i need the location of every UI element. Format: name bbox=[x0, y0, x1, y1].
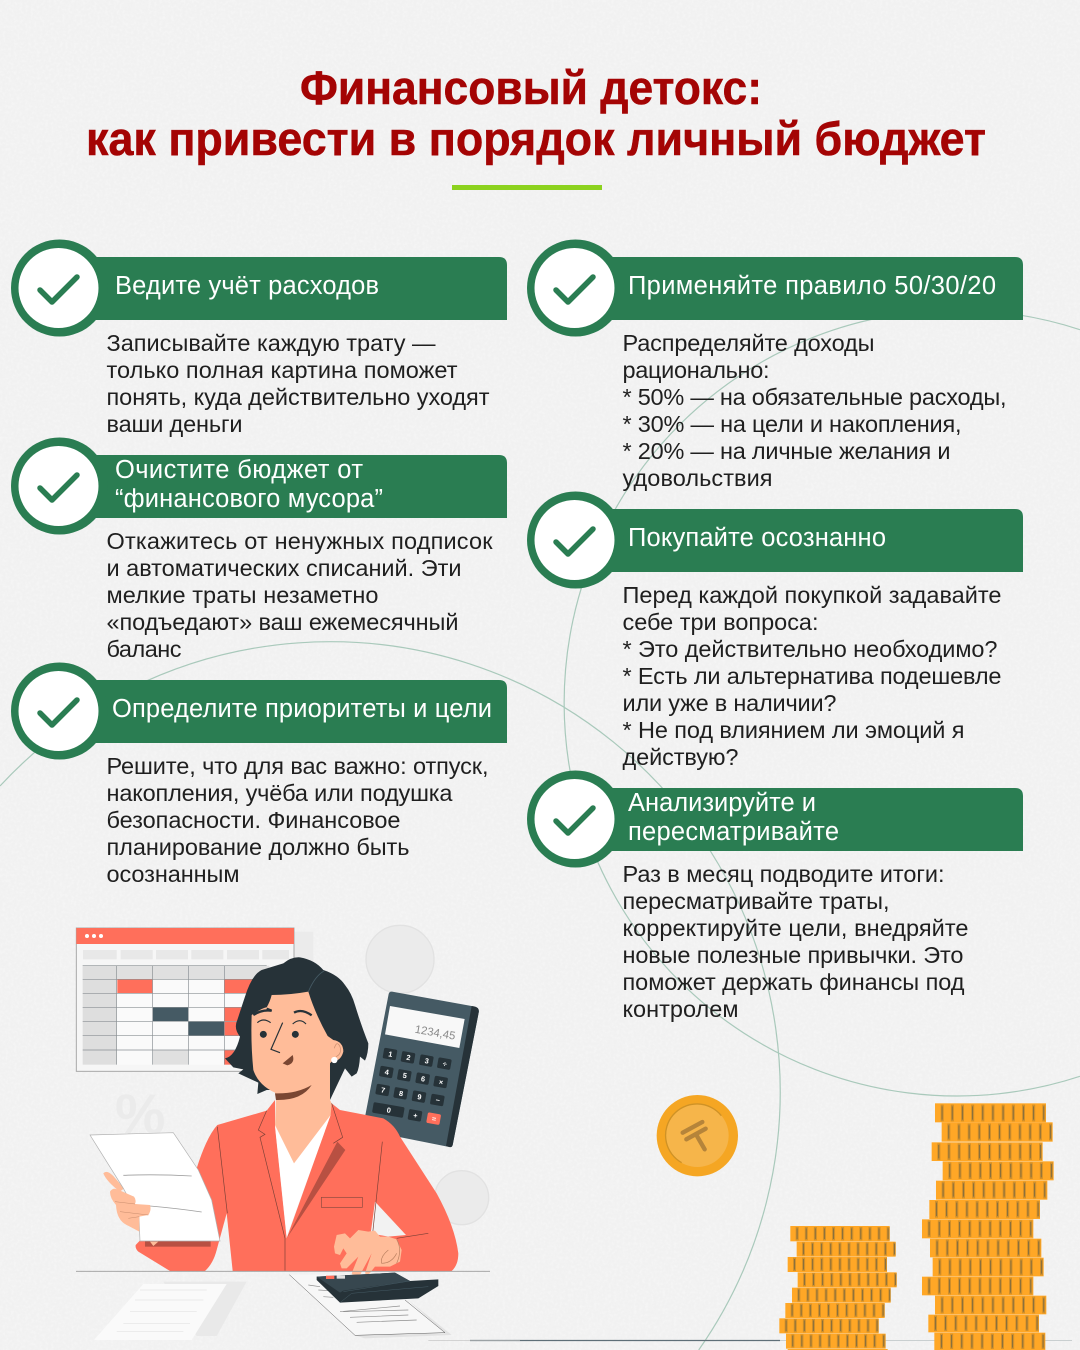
calculator: 3 bbox=[424, 1056, 430, 1066]
illustration: woman with documents and calculator: % bbox=[115, 1083, 165, 1146]
banner heading: Применяйте правило 50/30/20 bbox=[628, 272, 996, 300]
body text: себе три вопроса: bbox=[622, 609, 818, 635]
body text: Записывайте каждую трату — bbox=[106, 330, 436, 356]
body text: рационально: bbox=[622, 357, 770, 383]
hand on calculator bbox=[334, 1230, 402, 1276]
body text: пересматривайте траты, bbox=[622, 888, 890, 914]
body text bbox=[106, 753, 488, 887]
illustration: woman with documents and calculator bbox=[76, 925, 520, 1340]
body text: и автоматических списаний. Эти bbox=[106, 555, 462, 581]
body text: баланс bbox=[106, 636, 182, 662]
paper bbox=[90, 1133, 220, 1241]
desk document right bbox=[289, 1275, 452, 1338]
calculator: = bbox=[431, 1114, 437, 1124]
calculator: 6 bbox=[420, 1074, 426, 1084]
calculator: ÷ bbox=[442, 1059, 448, 1069]
panel: анализируйте bbox=[527, 770, 1023, 1022]
body text: или уже в наличии? bbox=[622, 690, 836, 716]
banner heading bbox=[527, 492, 1023, 588]
title bbox=[86, 61, 986, 165]
finger behind paper bbox=[103, 1172, 124, 1192]
body text: планирование должно быть bbox=[106, 834, 410, 860]
body text: новые полезные привычки. Это bbox=[622, 942, 964, 968]
body text: ваши деньги bbox=[106, 411, 242, 437]
banner heading bbox=[11, 438, 507, 534]
woman: face and neck bbox=[251, 992, 343, 1165]
panel: правило 50/30/20 bbox=[527, 240, 1023, 491]
desk document left bbox=[94, 1282, 247, 1340]
calculator: × bbox=[438, 1077, 444, 1087]
calculator: 0 bbox=[386, 1105, 392, 1115]
calculator: 8 bbox=[398, 1089, 404, 1098]
banner heading: “финансового мусора” bbox=[115, 485, 383, 513]
calculator: 2 bbox=[406, 1053, 411, 1062]
banner heading: Ведите учёт расходов bbox=[115, 272, 379, 300]
calculator: 1 bbox=[388, 1049, 393, 1059]
banner heading: пересматривайте bbox=[628, 818, 839, 846]
spreadsheet window bbox=[76, 928, 294, 1071]
body text: действую? bbox=[622, 744, 738, 770]
body text: * 30% — на цели и накопления, bbox=[622, 411, 962, 437]
body text bbox=[622, 861, 968, 1022]
body text: понять, куда действительно уходят bbox=[106, 384, 490, 410]
body text: * 20% — на личные желания и bbox=[622, 438, 950, 464]
body text: безопасности. Финансовое bbox=[106, 807, 400, 833]
banner heading bbox=[11, 662, 507, 760]
body text: корректируйте цели, внедряйте bbox=[622, 915, 968, 941]
calculator: 9 bbox=[417, 1092, 422, 1102]
title: как привести в порядок личный бюджет bbox=[86, 112, 986, 165]
body text: Перед каждой покупкой задавайте bbox=[622, 582, 1002, 608]
right coin stack bbox=[922, 1103, 1054, 1350]
body text: * Это действительно необходимо? bbox=[622, 636, 998, 662]
desk calculator bbox=[317, 1273, 438, 1303]
calculator: + bbox=[413, 1111, 418, 1120]
body text: поможет держать финансы под bbox=[622, 969, 965, 995]
panel: приоритеты и цели bbox=[11, 662, 507, 887]
panel: финансовый мусор bbox=[11, 438, 507, 662]
body text: удовольствия bbox=[622, 465, 772, 491]
body text: Откажитесь от ненужных подписок bbox=[106, 528, 493, 554]
body text bbox=[106, 528, 493, 662]
left coin stack bbox=[779, 1226, 897, 1350]
body text: только полная картина поможет bbox=[106, 357, 458, 383]
coin stacks bbox=[779, 1103, 1054, 1350]
title: Финансовый детокс: bbox=[300, 61, 762, 114]
body text: * Не под влиянием ли эмоций я bbox=[622, 717, 964, 743]
calculator: 4 bbox=[384, 1067, 390, 1077]
banner heading: Анализируйте и bbox=[628, 789, 816, 817]
banner heading bbox=[11, 240, 507, 336]
body text bbox=[622, 582, 1002, 770]
hand holding paper bbox=[110, 1189, 151, 1232]
panel: учёт расходов bbox=[11, 240, 507, 437]
body text: Распределяйте доходы bbox=[622, 330, 874, 356]
body text bbox=[622, 330, 1006, 491]
banner heading: Покупайте осознанно bbox=[628, 524, 886, 552]
banner heading bbox=[527, 240, 1023, 336]
body text bbox=[106, 330, 490, 437]
calculator: 1234,45 bbox=[414, 1024, 456, 1043]
body text: накопления, учёба или подушка bbox=[106, 780, 453, 806]
calculator: − bbox=[435, 1095, 441, 1105]
panel: покупайте осознанно bbox=[527, 492, 1023, 770]
calculator: 5 bbox=[402, 1071, 408, 1080]
banner heading: Очистите бюджет от bbox=[115, 456, 363, 484]
icon: tenge coin bbox=[657, 1095, 738, 1176]
body text: Решите, что для вас важно: отпуск, bbox=[106, 753, 488, 779]
body text: «подъедают» ваш ежемесячный bbox=[106, 609, 458, 635]
body text: * Есть ли альтернатива подешевле bbox=[622, 663, 1002, 689]
body text: осознанным bbox=[106, 861, 240, 887]
body text: контролем bbox=[622, 996, 738, 1022]
body text: Раз в месяц подводите итоги: bbox=[622, 861, 944, 887]
woman: hair bbox=[225, 957, 368, 1100]
calculator: 7 bbox=[380, 1085, 386, 1095]
banner heading: Определите приоритеты и цели bbox=[112, 695, 492, 723]
calculator bbox=[363, 992, 479, 1147]
body text: мелкие траты незаметно bbox=[106, 582, 378, 608]
woman: jacket bbox=[136, 1100, 458, 1271]
banner heading bbox=[527, 770, 1023, 868]
body text: * 50% — на обязательные расходы, bbox=[622, 384, 1006, 410]
